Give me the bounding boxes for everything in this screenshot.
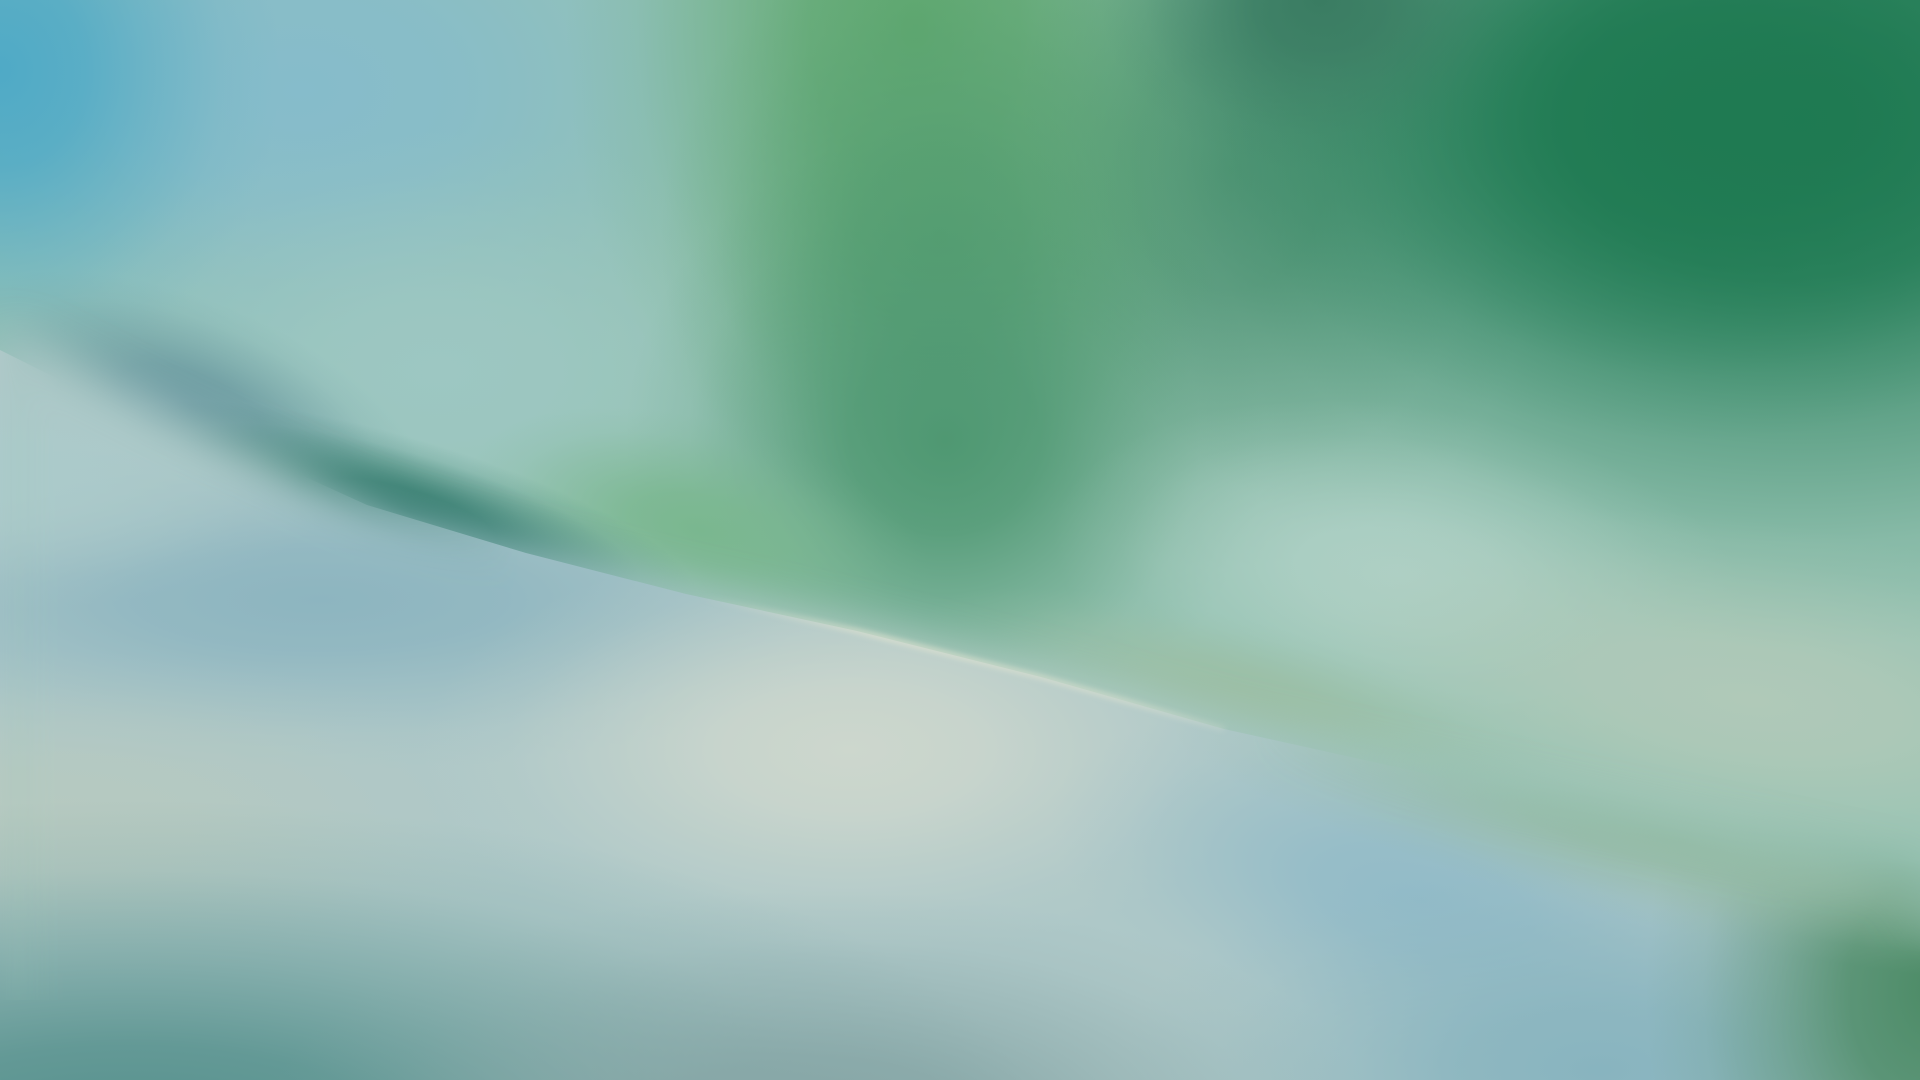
light crease highlight	[700, 597, 1224, 729]
lower field	[0, 328, 1920, 1080]
